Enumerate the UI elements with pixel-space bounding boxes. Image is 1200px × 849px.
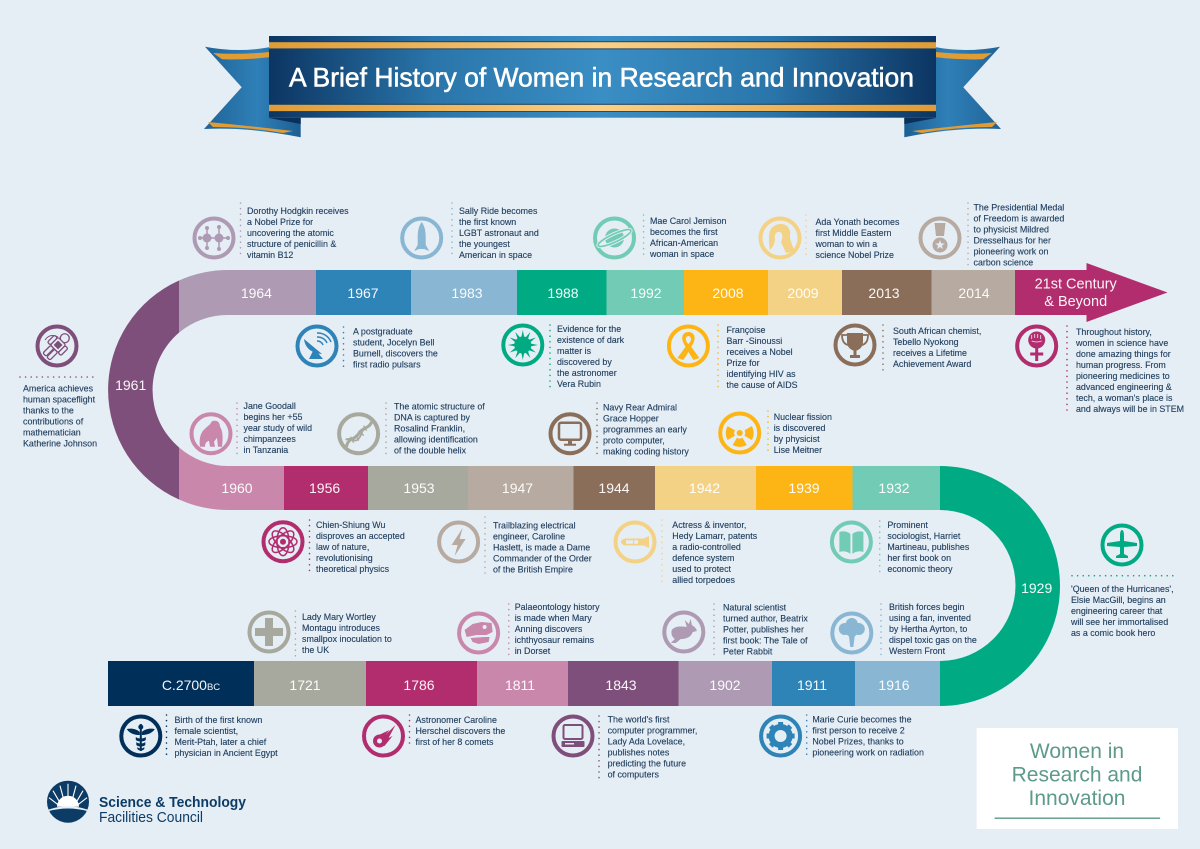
text: Caroline Haslett: engineer, Caroline: [493, 532, 565, 542]
year labels: 1953: [403, 480, 435, 496]
year labels: 1902: [709, 677, 741, 693]
text: Caroline Haslett: Haslett, is made a Dame: [493, 542, 590, 552]
text: Jocelyn Bell Burnell: student, Jocelyn Bell: [353, 338, 434, 348]
text: Caroline Herschel: first of her 8 comets: [416, 737, 494, 747]
text: Chien-Shiung Wu: disproves an accepted: [316, 531, 405, 541]
text: Caroline Haslett: Commander of the Order: [493, 554, 592, 564]
year labels: 1961: [115, 377, 146, 393]
event: Harriet Martineau: [832, 520, 970, 574]
event: Hedy Lamarr: [616, 520, 758, 585]
text: Mildred Dresselhaus: The Presidential Medal: [974, 202, 1064, 212]
text: Elsie MacGill: engineering career that: [1071, 606, 1163, 616]
text: Katherine Johnson: mathematician: [23, 428, 81, 438]
text: Ada Lovelace: publishes notes: [608, 748, 670, 758]
event: Tebello Nyokong: [836, 325, 981, 371]
icon: rocket: [402, 218, 441, 258]
year labels: 1811: [505, 677, 535, 693]
text: Elsie MacGill: as a comic book hero: [1071, 628, 1155, 638]
icon: medical cross: [250, 612, 288, 652]
text: Dorothy Hodgkin: uncovering the atomic: [247, 228, 334, 238]
text: Harriet Martineau: economic theory: [887, 564, 953, 574]
text: Chien-Shiung Wu: theoretical physics: [316, 564, 390, 574]
icon: head silhouette: [760, 218, 800, 258]
text: Mildred Dresselhaus: of Freedom is awarded: [974, 214, 1064, 224]
year labels: 1939: [788, 480, 820, 496]
panel: Women in Research and Innovation: Innovation: [1029, 787, 1125, 810]
text: Francoise Barre-Sinoussi: the cause of AIDS: [726, 380, 798, 390]
event: 21st century statement: [1017, 326, 1184, 414]
text: Jocelyn Bell Burnell: Burnell, discovers the: [353, 348, 438, 358]
icon: gorilla: [192, 414, 230, 453]
year labels: 1992: [630, 285, 662, 301]
text: Jane Goodall: in Tanzania: [244, 445, 288, 455]
arrow: 21st century: [1015, 263, 1168, 322]
text: Vera Rubin: discovered by: [557, 357, 612, 367]
text: Hertha Ayrton: by Hertha Ayrton, to: [889, 624, 967, 634]
text: Mary Anning: ichthyosaur remains: [515, 635, 595, 645]
text: Ada Lovelace: predicting the future: [608, 758, 686, 768]
left curve: 1961: [108, 280, 179, 500]
panel: Women in Research and Innovation: [977, 728, 1178, 829]
middle row segments: [179, 447, 940, 510]
text: Francoise Barre-Sinoussi: identifying HIV as: [726, 369, 796, 379]
text: Caroline Herschel: Astronomer Caroline: [416, 715, 497, 725]
title text: A Brief History of Women in Research and Innovation: [289, 63, 914, 93]
year labels: 1929: [1021, 580, 1052, 596]
text: 21st century statement: Throughout history,: [1076, 327, 1152, 337]
event: Sally Ride: [402, 203, 539, 260]
text: Merit-Ptah: physician in Ancient Egypt: [174, 748, 278, 758]
year labels: 1843: [605, 677, 637, 693]
text: Mae Carol Jemison: woman in space: [649, 249, 714, 259]
text: Grace Hopper: programmes an early: [603, 424, 687, 434]
icon: comet: [364, 716, 403, 756]
text: Mae Carol Jemison: Mae Carol Jemison: [650, 216, 727, 226]
text: Ada Yonath: first Middle Eastern: [816, 228, 892, 238]
text: Caroline Haslett: of the British Empire: [493, 564, 573, 574]
text: Hedy Lamarr: Hedy Lamarr, patents: [672, 531, 758, 541]
text: Ada Lovelace: The world's first: [608, 714, 670, 724]
icon: DNA helix: [339, 414, 378, 453]
text: Lady Mary Wortley Montagu: smallpox inoculation to: [302, 634, 392, 644]
text: Grace Hopper: Grace Hopper: [603, 414, 659, 424]
year labels: 1932: [878, 480, 910, 496]
text: Mary Anning: is made when Mary: [515, 613, 592, 623]
event: Katherine Johnson: [20, 326, 97, 448]
year labels: 1967: [347, 285, 379, 301]
text: Merit-Ptah: Birth of the first known: [174, 715, 262, 725]
text: Ada Lovelace: Lady Ada Lovelace,: [608, 736, 685, 746]
text: Jane Goodall: chimpanzees: [244, 434, 296, 444]
icon: trophy: [836, 326, 874, 364]
year labels: 1960: [221, 480, 253, 496]
text: Tebello Nyokong: Achievement Award: [893, 359, 971, 369]
text: Beatrix Potter: Potter, publishes her: [723, 624, 804, 634]
text: Hedy Lamarr: used to protect: [672, 564, 732, 574]
icon: dinosaur skull: [459, 614, 498, 652]
year labels: 1947: [502, 480, 533, 496]
text: Mildred Dresselhaus: to physicist Mildred: [974, 224, 1049, 234]
text: Ada Yonath: science Nobel Prize: [816, 250, 894, 260]
text: Mae Carol Jemison: becomes the first: [650, 227, 718, 237]
year labels: 1964: [241, 285, 272, 301]
text: Hedy Lamarr: allied torpedoes: [672, 575, 736, 585]
year labels: 2009: [787, 285, 819, 301]
text: Ada Lovelace: computer programmer,: [608, 726, 697, 736]
text: Francoise Barre-Sinoussi: Barr -Sinoussi: [726, 336, 782, 346]
text: Hertha Ayrton: dispel toxic gas on the: [889, 635, 977, 645]
text: Ada Yonath: woman to win a: [814, 239, 877, 249]
year labels: 1944: [598, 480, 630, 496]
icon: computer: [554, 716, 592, 756]
text: Harriet Martineau: Martineau, publishes: [887, 542, 970, 552]
icon: starburst: [503, 326, 542, 364]
icon: atom: [264, 522, 302, 561]
bottom row segments: [108, 661, 940, 706]
text: Rosalind Franklin: The atomic structure of: [394, 402, 485, 412]
text: Katherine Johnson: thanks to the: [23, 406, 74, 416]
text: Tebello Nyokong: South African chemist,: [893, 326, 981, 336]
text: Grace Hopper: proto computer,: [603, 436, 665, 446]
icon: molecule: [194, 218, 234, 258]
text: 21st century statement: pioneering medicines to: [1076, 371, 1170, 381]
icon: gear: [761, 716, 800, 756]
year labels: 1786: [403, 677, 435, 693]
ribbon tail: left: [204, 47, 301, 137]
text: Rosalind Franklin: Rosalind Franklin,: [394, 424, 465, 434]
text: Hedy Lamarr: Actress & inventor,: [672, 520, 746, 530]
text: Dorothy Hodgkin: vitamin B12: [247, 250, 293, 260]
text: Vera Rubin: the astronomer: [557, 368, 617, 378]
text: Sally Ride: American in space: [459, 250, 532, 260]
text: Lise Meitner: Lise Meitner: [774, 445, 822, 455]
text: Lady Mary Wortley Montagu: the UK: [302, 645, 329, 655]
year labels: C.2700BC: [162, 677, 220, 693]
text: Beatrix Potter: first book: The Tale of: [723, 636, 808, 646]
year labels: 1983: [451, 285, 483, 301]
icon: gas cloud tree: [832, 614, 871, 652]
panel: Women in Research and Innovation: Women in: [1030, 740, 1124, 763]
text: Dorothy Hodgkin: Dorothy Hodgkin receives: [247, 206, 349, 216]
text: Lise Meitner: by physicist: [774, 434, 820, 444]
text: 21st century statement: tech, a woman's place is: [1076, 393, 1173, 403]
text: Mary Anning: Palaeontology history: [515, 602, 600, 612]
event: Mary Anning: [459, 602, 600, 656]
text: Jocelyn Bell Burnell: first radio pulsars: [353, 360, 421, 370]
event: Lise Meitner: [720, 411, 832, 455]
text: Caroline Herschel: Herschel discovers the: [416, 726, 505, 736]
text: Katherine Johnson: Katherine Johnson: [23, 438, 97, 448]
text: Lise Meitner: is discovered: [774, 423, 826, 433]
text: Marie Curie: Marie Curie becomes the: [812, 714, 912, 724]
text: Grace Hopper: Navy Rear Admiral: [603, 402, 677, 412]
year labels: & Beyond: [1044, 294, 1107, 310]
text: Francoise Barre-Sinoussi: receives a Nobel: [726, 347, 793, 357]
text: Hertha Ayrton: Western Front: [889, 646, 946, 656]
event: Mildred Dresselhaus: [920, 202, 1064, 268]
text: Mae Carol Jemison: African-American: [650, 238, 718, 248]
icon: lightning bolt: [439, 522, 478, 562]
text: Jane Goodall: begins her +55: [244, 412, 303, 422]
text: Katherine Johnson: human spaceflight: [23, 394, 96, 404]
text: Chien-Shiung Wu: revolutionising: [316, 553, 373, 563]
event: Dorothy Hodgkin: [194, 203, 349, 260]
event: Jocelyn Bell Burnell: [298, 326, 438, 371]
text: Ada Yonath: Ada Yonath becomes: [816, 217, 900, 227]
top row segments: [179, 270, 1016, 333]
text: Rosalind Franklin: of the double helix: [394, 446, 467, 456]
event: Caroline Haslett: [439, 517, 592, 574]
year labels: 1721: [289, 677, 321, 693]
icon: plane: [1102, 526, 1142, 564]
text: Rosalind Franklin: DNA is captured by: [394, 412, 471, 422]
text: Dorothy Hodgkin: structure of penicillin &: [247, 239, 336, 249]
year labels: 1956: [309, 480, 340, 496]
text: Tebello Nyokong: receives a Lifetime: [893, 348, 967, 358]
event: Lady Mary Wortley Montagu: [250, 611, 392, 656]
icon: radio dish: [298, 326, 336, 366]
text: Vera Rubin: existence of dark: [557, 335, 625, 345]
text: Dorothy Hodgkin: a Nobel Prize for: [247, 217, 313, 227]
text: Hertha Ayrton: British forces begin: [889, 602, 965, 612]
icon: radiation: [720, 414, 759, 452]
icon: open book: [832, 522, 871, 562]
year labels: 2014: [958, 285, 990, 301]
event: Elsie MacGill: [1070, 526, 1176, 638]
text: Ada Lovelace: of computers: [608, 770, 659, 780]
text: Mary Anning: in Dorset: [515, 646, 551, 656]
event: Ada Yonath: [760, 215, 900, 260]
text: Harriet Martineau: Prominent: [887, 520, 928, 530]
year labels: 21st Century: [1035, 276, 1118, 292]
ribbon main band: [269, 36, 936, 118]
text: Francoise Barre-Sinoussi: Françoise: [726, 325, 766, 335]
text: Grace Hopper: making coding history: [603, 446, 689, 456]
panel: Women in Research and Innovation: Research and: [1012, 764, 1142, 786]
icon: planet: [595, 218, 634, 258]
text: Jane Goodall: year study of wild: [244, 423, 312, 433]
text: Beatrix Potter: turned author, Beatrix: [723, 614, 808, 624]
text: Mildred Dresselhaus: pioneering work on: [974, 246, 1049, 256]
event: Jane Goodall: [192, 401, 312, 455]
text: Vera Rubin: Vera Rubin: [557, 379, 601, 389]
text: 21st century statement: women in science have: [1075, 338, 1168, 348]
text: Hertha Ayrton: using a fan, invented: [889, 613, 971, 623]
text: Chien-Shiung Wu: Chien-Shiung Wu: [316, 520, 385, 530]
text: 21st century statement: done amazing things for: [1076, 349, 1171, 359]
logo text: Science & Technology: [99, 794, 247, 811]
text: Sally Ride: the first known: [459, 217, 516, 227]
event: Chien-Shiung Wu: [264, 520, 405, 574]
icon: caduceus: [121, 716, 160, 756]
text: Hedy Lamarr: a radio-controlled: [672, 542, 741, 552]
text: Mary Anning: Anning discovers: [515, 624, 583, 634]
text: Marie Curie: first person to receive 2: [812, 726, 905, 736]
event: Grace Hopper: [550, 402, 689, 456]
text: Francoise Barre-Sinoussi: Prize for: [726, 358, 760, 368]
event: Ada Lovelace: [554, 714, 697, 780]
year labels: 1916: [878, 677, 910, 693]
event: Caroline Herschel: [364, 715, 505, 756]
logo: Science and Technology Facilities Council: [47, 781, 247, 826]
ribbon tail: right: [904, 47, 1001, 137]
text: Lady Mary Wortley Montagu: Montagu introduces: [302, 623, 381, 633]
title banner: [204, 36, 1001, 137]
text: Chien-Shiung Wu: law of nature,: [316, 542, 369, 552]
icon: medal: [920, 218, 960, 258]
text: Rosalind Franklin: allowing identification: [394, 434, 478, 444]
text: Caroline Haslett: Trailblazing electrical: [493, 520, 576, 530]
text: Sally Ride: the youngest: [459, 239, 510, 249]
text: Merit-Ptah: Merit-Ptah, later a chief: [174, 737, 267, 747]
year labels: 2013: [868, 285, 900, 301]
text: Elsie MacGill: 'Queen of the Hurricanes',: [1071, 584, 1174, 594]
text: Tebello Nyokong: Tebello Nyokong: [893, 337, 959, 347]
icon: venus fist: [1017, 326, 1056, 366]
text: Harriet Martineau: her first book on: [887, 553, 951, 563]
text: Merit-Ptah: female scientist,: [174, 726, 238, 736]
text: 21st century statement: and always will be in STEM: [1076, 404, 1184, 414]
year labels: 1988: [547, 285, 579, 301]
icon: torpedo: [616, 522, 654, 562]
year labels: 1942: [689, 480, 720, 496]
text: Jane Goodall: Jane Goodall: [244, 401, 296, 411]
right curve: 1929: [940, 466, 1060, 706]
text: Jocelyn Bell Burnell: A postgraduate: [353, 326, 413, 336]
text: Mildred Dresselhaus: carbon science: [974, 258, 1033, 268]
event: Vera Rubin: [503, 324, 625, 389]
event: Francoise Barre-Sinoussi: [669, 325, 798, 390]
text: Katherine Johnson: contributions of: [23, 416, 84, 426]
text: Lady Mary Wortley Montagu: Lady Mary Wortley: [302, 612, 376, 622]
event: Rosalind Franklin: [339, 402, 485, 456]
text: Vera Rubin: Evidence for the: [557, 324, 621, 334]
timeline road: [108, 263, 1168, 706]
text: 21st century statement: human progress. From: [1076, 360, 1166, 370]
event: Beatrix Potter: [664, 602, 808, 656]
text: Hedy Lamarr: defence system: [672, 553, 734, 563]
logo: Science and Technology Facilities Council: Facilities Council: [99, 809, 203, 826]
logo mark: rising sun: [47, 781, 89, 823]
year labels: [115, 276, 1118, 693]
text: Elsie MacGill: Elsie MacGill, begins an: [1071, 595, 1166, 605]
text: Sally Ride: Sally Ride becomes: [459, 206, 538, 216]
icon: monitor: [550, 414, 590, 453]
text: Katherine Johnson: America achieves: [23, 384, 94, 394]
text: Vera Rubin: matter is: [557, 346, 592, 356]
text: Marie Curie: pioneering work on radiation: [812, 748, 924, 758]
text: Beatrix Potter: Natural scientist: [723, 602, 787, 612]
event: Hertha Ayrton: [832, 602, 977, 656]
text: Elsie MacGill: will see her immortalised: [1070, 617, 1168, 627]
text: 21st century statement: advanced engineering &: [1076, 382, 1172, 392]
event: Merit-Ptah: [121, 715, 278, 758]
icon: astronaut: [38, 326, 76, 366]
text: Lise Meitner: Nuclear fission: [774, 412, 832, 422]
icon: awareness ribbon: [669, 326, 708, 366]
year labels: 1911: [797, 677, 827, 693]
event: Mae Carol Jemison: [595, 215, 727, 259]
year labels: 2008: [712, 285, 744, 301]
text: Mildred Dresselhaus: Dresselhaus for her: [974, 236, 1051, 246]
text: Beatrix Potter: Peter Rabbit: [723, 646, 773, 656]
text: Marie Curie: Nobel Prizes, thanks to: [812, 736, 904, 746]
text: Harriet Martineau: sociologist, Harriet: [887, 531, 961, 541]
icon: rabbit: [664, 612, 703, 652]
event: Marie Curie: [761, 714, 924, 758]
text: Sally Ride: LGBT astronaut and: [459, 228, 539, 238]
